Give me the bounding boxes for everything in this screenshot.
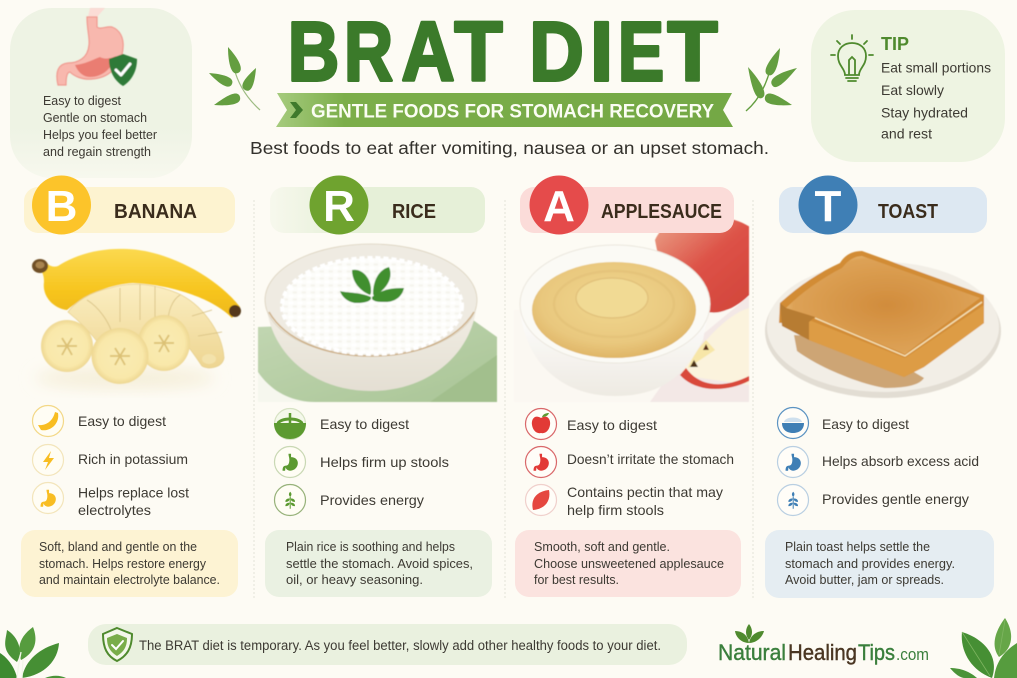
rice benefits: Helps firm up stools: [320, 454, 449, 470]
icon: shield: [103, 628, 132, 661]
applesauce note: Choose unsweetened applesauce: [534, 557, 724, 571]
applesauce benefits: [526, 408, 734, 518]
rice note: Plain rice is soothing and helps: [286, 540, 455, 554]
panel: stomach benefits: [10, 8, 192, 178]
icon: apple: [526, 408, 556, 440]
banana benefits: Easy to digest: [78, 413, 166, 429]
toast benefits: [778, 408, 979, 516]
icon: right leaf sprig: [746, 48, 797, 111]
logo: Natural: [718, 640, 786, 665]
rice note: settle the stomach. Avoid spices,: [286, 557, 473, 571]
text: stomach benefits: Gentle on stomach: [43, 111, 147, 125]
applesauce header: APPLESAUCE: [601, 201, 722, 223]
banana benefits: [32, 406, 189, 518]
icon: rice bowl: [274, 408, 306, 440]
icon: stomach: [32, 482, 64, 514]
text: stomach benefits: Helps you feel better: [43, 128, 157, 142]
icon: wheat: [778, 484, 808, 516]
banana benefits: Helps replace lost: [78, 484, 189, 500]
title: E: [618, 5, 664, 99]
subtitle ribbon: GENTLE FOODS FOR STOMACH RECOVERY: [311, 100, 714, 122]
rice note: [265, 530, 492, 597]
logo: .com: [896, 645, 929, 664]
text: tip: and rest: [881, 126, 932, 142]
applesauce note: Smooth, soft and gentle.: [534, 540, 670, 554]
toast note: [765, 530, 994, 598]
icon: wheat: [274, 484, 306, 516]
text: tip: Eat small portions: [881, 60, 991, 76]
bottom banner: [88, 624, 687, 665]
banana photo illustration: [32, 249, 241, 388]
banana note: Soft, bland and gentle on the: [39, 540, 197, 554]
text: stomach benefits: and regain strength: [43, 145, 151, 159]
text: tip: [881, 34, 991, 142]
text: tip: Eat slowly: [881, 82, 944, 98]
applesauce benefits: Easy to digest: [567, 417, 657, 433]
logo: [718, 624, 929, 665]
applesauce header: [520, 176, 734, 234]
toast header: TOAST: [878, 201, 938, 223]
applesauce photo illustration: [514, 218, 767, 402]
rice header: R: [323, 182, 355, 231]
logo: Healing: [788, 640, 857, 665]
icon: bottom-left foliage: [0, 627, 66, 678]
toast benefits: Provides gentle energy: [822, 491, 969, 507]
icon: lightning: [32, 444, 64, 476]
text: stomach benefits: Easy to digest: [43, 94, 122, 108]
icon: stomach: [778, 446, 808, 478]
panel: rice: [258, 176, 497, 597]
toast note: Plain toast helps settle the: [785, 540, 930, 554]
logo: Tips: [858, 640, 895, 665]
applesauce note: [515, 530, 741, 597]
toast note: stomach and provides energy.: [785, 557, 955, 571]
text: tip: Stay hydrated: [881, 104, 968, 120]
tagline: Best foods to eat after vomiting, nausea or an upset stomach.: [250, 138, 769, 158]
toast benefits: Easy to digest: [822, 416, 909, 432]
rice benefits: [274, 408, 449, 516]
title: A: [401, 4, 455, 99]
toast benefits: Helps absorb excess acid: [822, 453, 979, 469]
bottom banner: The BRAT diet is temporary. As you feel better, slowly add other healthy foods to your diet.: [139, 638, 661, 653]
banana note: and maintain electrolyte balance.: [39, 573, 220, 587]
title: T: [667, 5, 718, 99]
panel: tip: [811, 10, 1005, 162]
banana note: [21, 530, 238, 597]
toast header: T: [815, 182, 842, 231]
banana benefits: electrolytes: [78, 502, 151, 518]
rice benefits: Provides energy: [320, 492, 424, 508]
rice note: oil, or heavy seasoning.: [286, 573, 423, 587]
title: B: [288, 4, 339, 99]
icon: leaf: [526, 484, 556, 516]
text: stomach benefits: [43, 94, 157, 159]
applesauce benefits: help firm stools: [567, 502, 664, 518]
title: D: [529, 5, 584, 98]
icon: stomach: [274, 446, 306, 478]
icon: stomach: [526, 446, 556, 478]
title: I: [590, 4, 613, 98]
applesauce note: for best results.: [534, 573, 619, 587]
applesauce benefits: Doesn’t irritate the stomach: [567, 451, 734, 467]
title: R: [344, 6, 393, 99]
panel: banana: [21, 176, 241, 597]
applesauce benefits: Contains pectin that may: [567, 484, 723, 500]
panel: toast: [765, 176, 1001, 598]
rice header: [270, 176, 485, 234]
title: [288, 4, 718, 99]
icon: left leaf sprig: [209, 47, 260, 110]
banana header: BANANA: [114, 201, 197, 223]
icon: banana: [32, 406, 64, 436]
panel: applesauce: [514, 176, 767, 597]
icon: logo leaves: [735, 624, 764, 643]
toast note: Avoid butter, jam or spreads.: [785, 573, 944, 587]
icon: light bulb: [831, 35, 873, 81]
subtitle ribbon: [276, 93, 733, 127]
banana benefits: Rich in potassium: [78, 451, 188, 467]
banana header: [24, 176, 235, 234]
toast header: [779, 176, 987, 234]
icon: stomach with shield: [57, 8, 137, 86]
toast photo illustration: [765, 251, 1001, 398]
applesauce header: A: [543, 182, 575, 231]
icon: bottom-right foliage: [950, 618, 1017, 678]
banana note: stomach. Helps restore energy: [39, 557, 207, 571]
icon: bowl: [778, 408, 808, 438]
rice header: RICE: [392, 201, 436, 223]
title: T: [454, 5, 503, 99]
text: tip: TIP: [881, 34, 909, 54]
rice photo illustration: [258, 244, 497, 402]
banana header: B: [46, 182, 77, 231]
rice benefits: Easy to digest: [320, 416, 409, 432]
